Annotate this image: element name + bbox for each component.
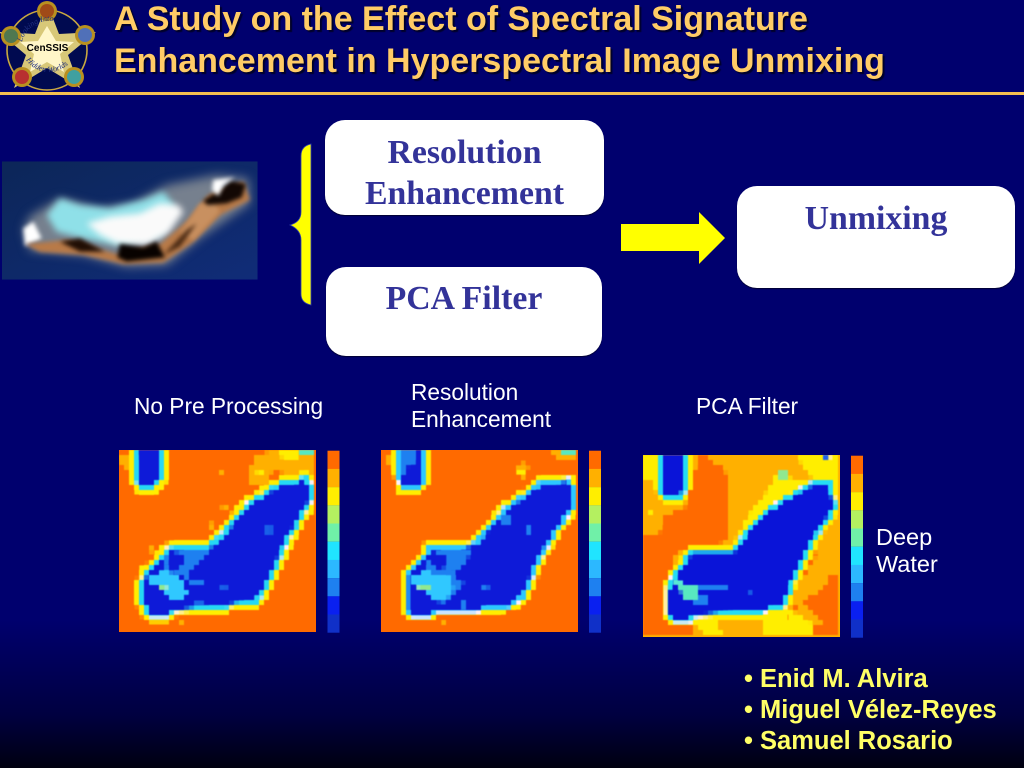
author list: • Miguel Vélez-Reyes [744,696,997,724]
label: no pre processing: No Pre Processing [134,393,323,419]
map: PCA filter [643,455,863,638]
label: resolution enhancement [411,379,551,432]
logo: CenSSIS star: CenSSIS [27,43,69,54]
label: deep water: Deep [876,524,932,550]
author list: • Enid M. Alvira [744,665,928,693]
title: Enhancement in Hyperspectral Image Unmixing [114,42,885,80]
box: PCA filter [326,267,602,356]
label: resolution enhancement: Resolution [411,379,518,405]
logo: CenSSIS star: Hidden Worlds [26,57,68,72]
box: resolution enhancement: Enhancement [365,174,564,212]
box: resolution enhancement: Resolution [388,134,541,171]
author list: • Samuel Rosario [744,727,953,755]
title: A Study on the Effect of Spectral Signature [114,0,808,38]
label: deep water [876,524,938,577]
box: PCA filter: PCA Filter [386,280,542,317]
map: resolution enhancement [381,450,601,633]
brace [289,144,312,306]
header rule [0,92,1024,95]
box: unmixing: Unmixing [805,200,947,237]
colorbar [589,451,601,633]
colorbar [851,456,863,638]
logo: CenSSIS star [0,1,96,91]
label: resolution enhancement: Enhancement [411,406,551,432]
colorbar [328,451,340,633]
title [114,0,885,82]
box: resolution enhancement [325,120,604,215]
label: deep water: Water [876,551,938,577]
label: PCA filter: PCA Filter [696,393,798,419]
box: unmixing [737,186,1015,288]
logo: CenSSIS star: Looking Into [17,16,54,42]
map: no pre processing [119,450,340,633]
satellite image of island [2,162,258,280]
author list [744,665,997,755]
arrow [621,212,725,264]
